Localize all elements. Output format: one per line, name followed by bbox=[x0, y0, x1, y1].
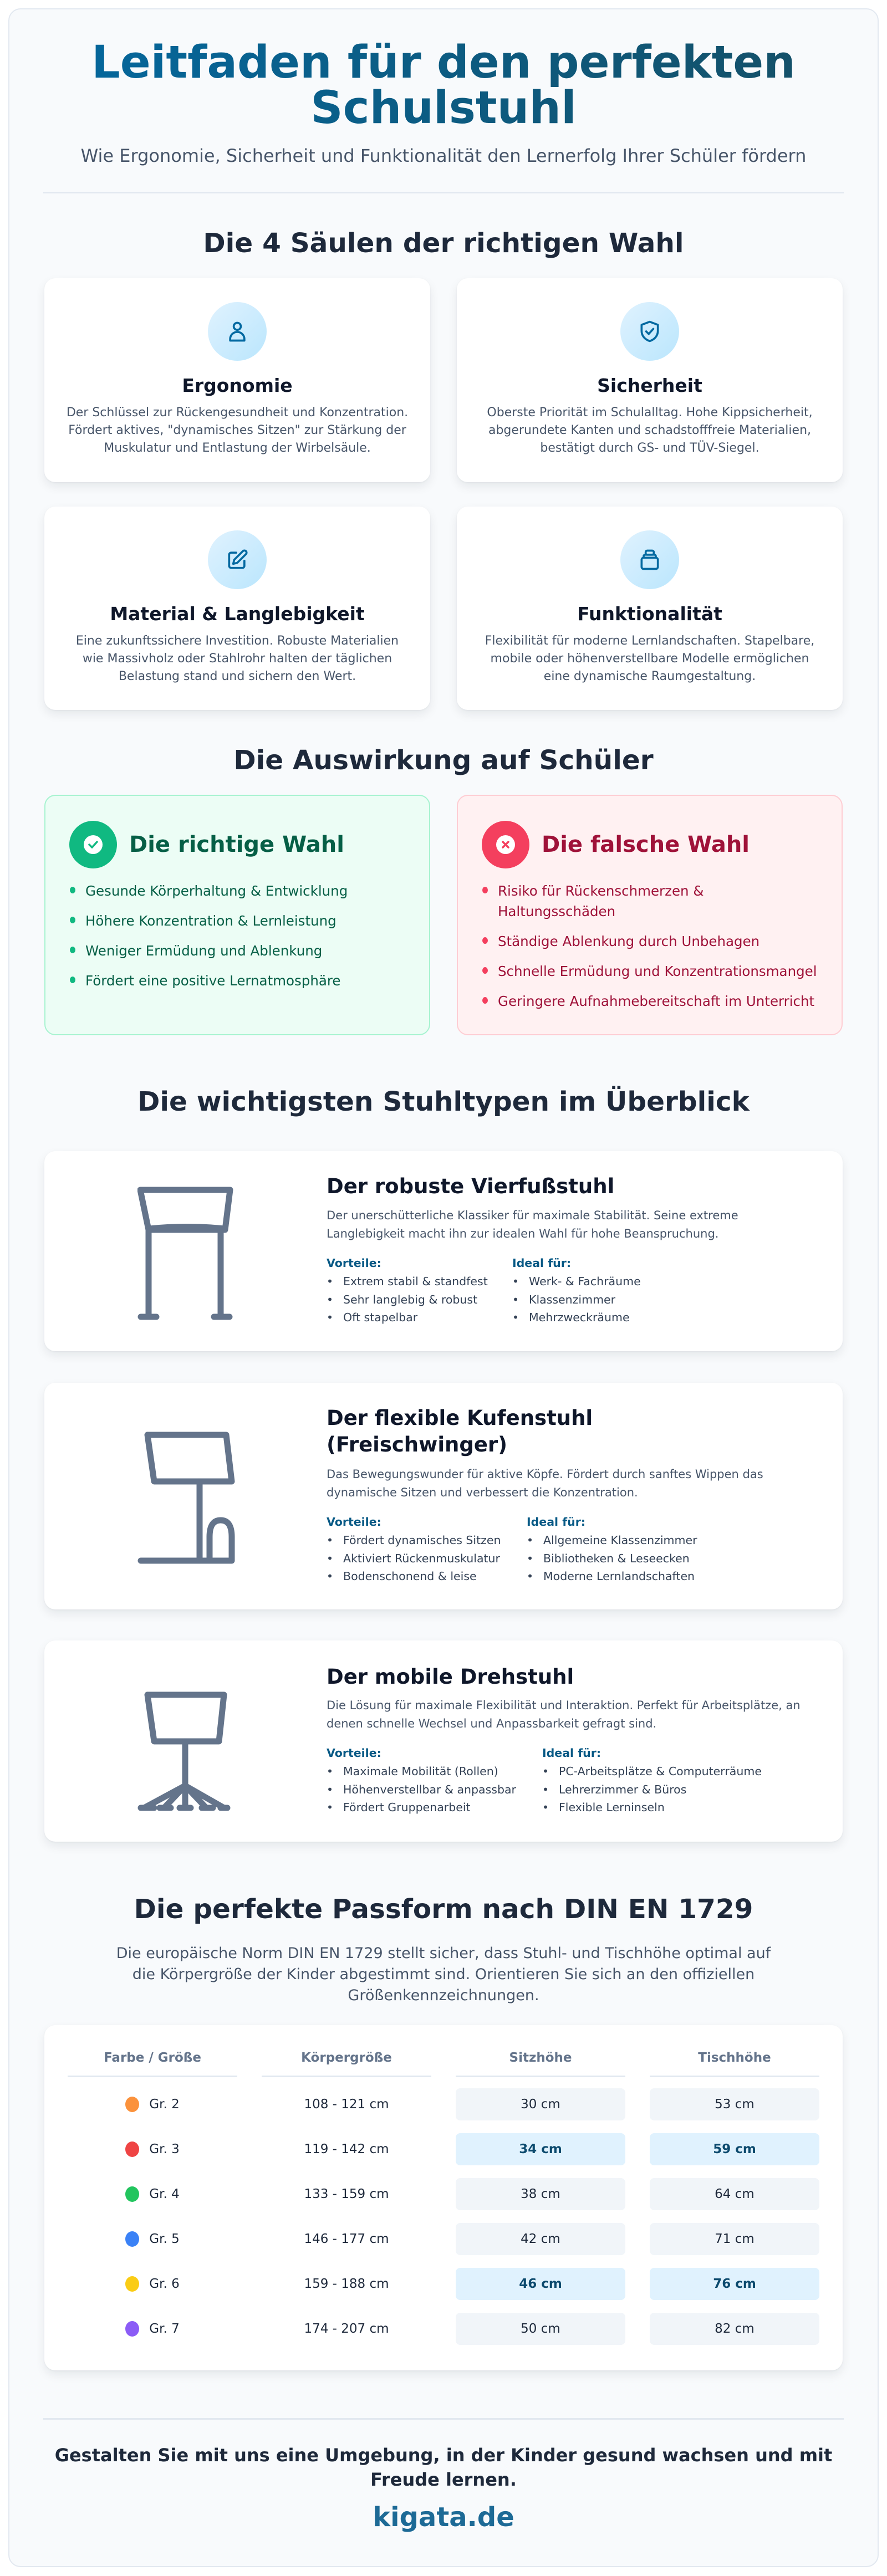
card text: Muskulatur und Entlastung der Wirbelsäule. bbox=[104, 441, 371, 455]
list: Ideal für bbox=[527, 1515, 697, 1583]
list: Vorteile: Bodenschonend & leise bbox=[343, 1570, 477, 1583]
text: 133 - 159 cm bbox=[304, 2187, 389, 2201]
card text: abgerundete Kanten und schadstofffreie Materialien, bbox=[488, 423, 811, 437]
text: 34 cm bbox=[519, 2142, 562, 2156]
text: Gr. 4 bbox=[149, 2187, 180, 2201]
heading: pillars: Die 4 Säulen der richtigen Wahl bbox=[203, 228, 684, 259]
list: Vorteile: Sehr langlebig & robust bbox=[343, 1292, 477, 1306]
list: Vorteile: Oft stapelbar bbox=[343, 1311, 417, 1324]
list: Geringere Aufnahmebereitschaft im Unterricht bbox=[498, 993, 814, 1009]
description bbox=[327, 1209, 738, 1240]
text: 76 cm bbox=[713, 2277, 756, 2291]
title bbox=[0, 40, 887, 131]
card title: Funktionalität bbox=[577, 603, 722, 625]
list: Ideal für: Werk- & Fachräume bbox=[529, 1275, 641, 1288]
list: Ideal für: Allgemeine Klassenzimmer bbox=[543, 1534, 697, 1547]
text: 38 cm bbox=[521, 2187, 560, 2201]
card text: eine dynamische Raumgestaltung. bbox=[544, 669, 756, 683]
card title: Ergonomie bbox=[182, 375, 293, 396]
list: Vorteile: Vorteile: bbox=[327, 1746, 381, 1760]
card text: bestätigt durch GS- und TÜV-Siegel. bbox=[540, 441, 759, 455]
text: 64 cm bbox=[715, 2187, 755, 2201]
card text bbox=[76, 634, 399, 683]
card text: Belastung stand und sichern den Wert. bbox=[119, 669, 356, 683]
text: 71 cm bbox=[715, 2232, 755, 2246]
text: 53 cm bbox=[715, 2097, 755, 2112]
list: Ideal für: Mehrzweckräume bbox=[529, 1311, 630, 1324]
list: Ideal für: Bibliotheken & Leseecken bbox=[543, 1552, 690, 1565]
card text: mobile oder höhenverstellbare Modelle ermöglichen bbox=[491, 652, 809, 666]
list: Ideal für: Ideal für: bbox=[542, 1746, 601, 1760]
list: Ideal für bbox=[542, 1746, 762, 1814]
text: Farbe / Größe bbox=[104, 2051, 201, 2065]
list: Ideal für: Ideal für: bbox=[512, 1256, 571, 1270]
subtitle: Wie Ergonomie, Sicherheit und Funktionalität den Lernerfolg Ihrer Schüler fördern bbox=[81, 145, 806, 166]
panel: Funktionalität bbox=[457, 507, 843, 710]
list: Vorteile bbox=[327, 1515, 501, 1583]
text: 82 cm bbox=[715, 2322, 755, 2336]
list bbox=[70, 883, 348, 989]
panel: richtige Wahl bbox=[44, 795, 430, 1035]
list: Risiko für Rückenschmerzen & bbox=[498, 883, 704, 899]
panel: Kufenstuhl bbox=[44, 1383, 843, 1609]
card text: Eine zukunftssichere Investition. Robuste Materialien bbox=[76, 634, 399, 648]
heading: chair types: Die wichtigsten Stuhltypen im Überblick bbox=[137, 1086, 750, 1117]
box title: Die falsche Wahl bbox=[542, 832, 750, 857]
intro text: Größenkennzeichnungen. bbox=[348, 1987, 539, 2004]
text: 108 - 121 cm bbox=[304, 2097, 389, 2112]
intro text: Die europäische Norm DIN EN 1729 stellt sicher, dass Stuhl- und Tischhöhe optimal auf bbox=[116, 1945, 771, 1962]
icon: check bbox=[69, 821, 117, 868]
text: 146 - 177 cm bbox=[304, 2232, 389, 2246]
card text: Der Schlüssel zur Rückengesundheit und Konzentration. bbox=[67, 406, 408, 420]
list: Vorteile: Aktiviert Rückenmuskulatur bbox=[343, 1552, 500, 1565]
text: 46 cm bbox=[519, 2277, 562, 2291]
list: Weniger Ermüdung und Ablenkung bbox=[85, 943, 322, 959]
footer text bbox=[55, 2445, 832, 2490]
intro text: die Körpergröße der Kinder abgestimmt sind. Orientieren Sie sich an den offiziellen bbox=[132, 1966, 755, 1983]
panel: Vierfußstuhl bbox=[44, 1151, 843, 1351]
icon: shield bbox=[620, 302, 679, 361]
list: Ideal für: Flexible Lerninseln bbox=[559, 1801, 665, 1814]
description: Der unerschütterliche Klassiker für maximale Stabilität. Seine extreme bbox=[327, 1209, 738, 1222]
text: Körpergröße bbox=[301, 2051, 392, 2065]
text: Gr. 7 bbox=[149, 2322, 180, 2336]
list: Vorteile: Vorteile: bbox=[327, 1515, 381, 1529]
text: Gr. 2 bbox=[149, 2097, 180, 2112]
card text: Oberste Priorität im Schulalltag. Hohe Kippsicherheit, bbox=[487, 406, 813, 420]
panel: Ergonomie bbox=[44, 278, 430, 482]
description: denen schnelle Wechsel und Anpassbarkeit gefragt sind. bbox=[327, 1717, 656, 1730]
description: dynamische Sitzen und verbessert die Konzentration. bbox=[327, 1486, 638, 1499]
text: 42 cm bbox=[521, 2232, 560, 2246]
icon: cross bbox=[482, 821, 529, 868]
brand: kigata.de bbox=[373, 2502, 514, 2533]
text: Gr. 5 bbox=[149, 2232, 180, 2246]
panel: Drehstuhl bbox=[44, 1640, 843, 1842]
list: Ideal für: Klassenzimmer bbox=[529, 1292, 615, 1306]
list: Vorteile: Fördert dynamisches Sitzen bbox=[343, 1534, 501, 1547]
text: 174 - 207 cm bbox=[304, 2322, 389, 2336]
list: Vorteile: Maximale Mobilität (Rollen) bbox=[343, 1765, 498, 1778]
card text: Flexibilität für moderne Lernlandschaften. Stapelbare, bbox=[485, 634, 814, 648]
icon: four-leg chair bbox=[137, 1187, 233, 1320]
footer text: Gestalten Sie mit uns eine Umgebung, in der Kinder gesund wachsen und mit bbox=[55, 2445, 832, 2466]
text: 50 cm bbox=[521, 2322, 560, 2336]
card text: wie Massivholz oder Stahlrohr halten der täglichen bbox=[83, 652, 392, 666]
text: Gr. 3 bbox=[149, 2142, 180, 2156]
list: Haltungsschäden bbox=[498, 903, 615, 919]
card text: Fördert aktives, "dynamisches Sitzen" zur Stärkung der bbox=[68, 423, 406, 437]
card title: Sicherheit bbox=[597, 375, 702, 396]
text: 30 cm bbox=[521, 2097, 560, 2112]
title: Schulstuhl bbox=[310, 82, 577, 134]
panel: Material bbox=[44, 507, 430, 710]
list: Ideal für: Moderne Lernlandschaften bbox=[543, 1570, 695, 1583]
heading: DIN EN 1729: Die perfekte Passform nach DIN EN 1729 bbox=[134, 1894, 753, 1925]
description bbox=[327, 1468, 763, 1499]
card text bbox=[485, 634, 814, 683]
list: Fördert eine positive Lernatmosphäre bbox=[85, 973, 340, 989]
list: Ideal für bbox=[512, 1256, 641, 1324]
list: Gesunde Körperhaltung & Entwicklung bbox=[85, 883, 348, 899]
list: Ideal für: PC-Arbeitsplätze & Computerräume bbox=[559, 1765, 762, 1778]
list: Vorteile bbox=[327, 1256, 488, 1324]
footer text: Freude lernen. bbox=[370, 2469, 517, 2490]
text: 159 - 188 cm bbox=[304, 2277, 389, 2291]
list: Vorteile: Fördert Gruppenarbeit bbox=[343, 1801, 471, 1814]
icon: cantilever chair bbox=[137, 1432, 235, 1564]
title: Der flexible Kufenstuhl bbox=[327, 1406, 593, 1430]
panel: falsche Wahl bbox=[457, 795, 843, 1035]
list: Ideal für: Ideal für: bbox=[527, 1515, 585, 1529]
description: Das Bewegungswunder für aktive Köpfe. Fördert durch sanftes Wippen das bbox=[327, 1468, 763, 1481]
panel: Sicherheit bbox=[457, 278, 843, 482]
title: Leitfaden für den perfekten bbox=[91, 37, 796, 89]
list: Vorteile: Extrem stabil & standfest bbox=[343, 1275, 488, 1288]
card title: Material & Langlebigkeit bbox=[110, 603, 365, 625]
list: Vorteile: Höhenverstellbar & anpassbar bbox=[343, 1782, 516, 1796]
heading: impact: Die Auswirkung auf Schüler bbox=[233, 745, 654, 776]
title bbox=[327, 1406, 593, 1456]
list: Ideal für: Lehrerzimmer & Büros bbox=[559, 1782, 686, 1796]
description bbox=[327, 1699, 801, 1730]
list: Höhere Konzentration & Lernleistung bbox=[85, 913, 337, 929]
title: (Freischwinger) bbox=[327, 1433, 507, 1456]
card text bbox=[487, 406, 813, 455]
text: Tischhöhe bbox=[698, 2051, 771, 2065]
description: Die Lösung für maximale Flexibilität und Interaktion. Perfekt für Arbeitsplätze, an bbox=[327, 1699, 801, 1712]
icon: person bbox=[208, 302, 267, 361]
list: Schnelle Ermüdung und Konzentrationsmangel bbox=[498, 963, 817, 979]
text: Gr. 6 bbox=[149, 2277, 180, 2291]
list: Ständige Ablenkung durch Unbehagen bbox=[498, 933, 759, 949]
list: Vorteile bbox=[327, 1746, 516, 1814]
title: Der mobile Drehstuhl bbox=[327, 1665, 574, 1689]
icon: stack bbox=[620, 530, 679, 589]
card text bbox=[67, 406, 408, 455]
intro text bbox=[116, 1945, 771, 2004]
list bbox=[482, 883, 817, 1009]
icon: swivel chair bbox=[137, 1691, 231, 1811]
text: Sitzhöhe bbox=[509, 2051, 572, 2065]
icon: pencil bbox=[208, 530, 267, 589]
size table bbox=[44, 2025, 843, 2370]
text: 59 cm bbox=[713, 2142, 756, 2156]
box title: Die richtige Wahl bbox=[129, 832, 344, 857]
text: 119 - 142 cm bbox=[304, 2142, 389, 2156]
list: Vorteile: Vorteile: bbox=[327, 1256, 381, 1270]
description: Langlebigkeit macht ihn zur idealen Wahl für hohe Beanspruchung. bbox=[327, 1227, 718, 1240]
title: Der robuste Vierfußstuhl bbox=[327, 1174, 614, 1198]
